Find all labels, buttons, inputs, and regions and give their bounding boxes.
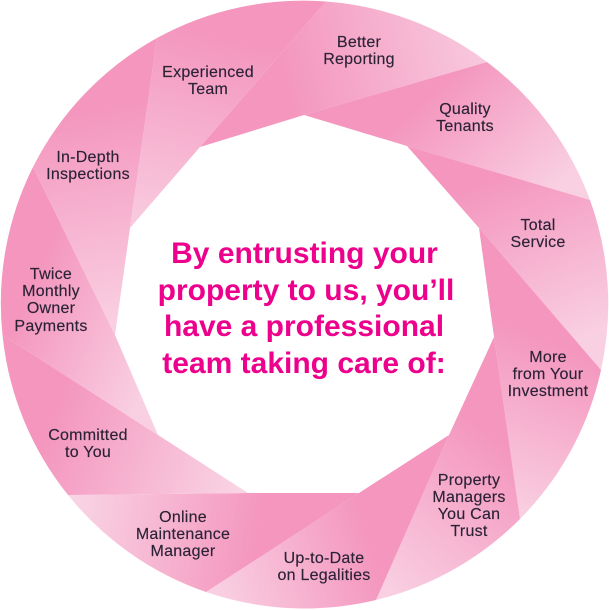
segment: Online Maintenance Manager bbox=[68, 493, 359, 592]
segment: Twice Monthly Owner Payments: Monthly bbox=[22, 283, 80, 300]
segment: Up-to-Date on Legalities: on Legalities bbox=[277, 567, 371, 584]
segment: Property Managers You Can Trust: Managers bbox=[432, 489, 506, 506]
segment: More from Your Investment: More bbox=[529, 349, 567, 366]
segment: Total Service bbox=[407, 146, 608, 370]
central heading: By entrusting your bbox=[171, 237, 438, 270]
central heading bbox=[158, 237, 454, 380]
segment: Property Managers You Can Trust: You Can bbox=[438, 506, 500, 523]
segment: Property Managers You Can Trust: Trust bbox=[450, 523, 488, 540]
segment: Twice Monthly Owner Payments: Twice bbox=[30, 266, 72, 283]
segment: Quality Tenants: Quality bbox=[439, 101, 491, 118]
segment: Committed to You: to You bbox=[65, 444, 111, 461]
central heading: team taking care of: bbox=[162, 347, 446, 380]
segment: Better Reporting: Reporting bbox=[323, 51, 395, 68]
segment: Up-to-Date on Legalities bbox=[206, 435, 449, 608]
segment: Twice Monthly Owner Payments: Owner bbox=[27, 300, 76, 317]
segment: Experienced Team: Experienced bbox=[162, 64, 254, 81]
segment: Up-to-Date on Legalities: Up-to-Date bbox=[284, 550, 364, 567]
segment: Property Managers You Can Trust bbox=[376, 337, 520, 600]
segment: Experienced Team: Team bbox=[188, 81, 228, 98]
segment: Committed to You bbox=[2, 335, 248, 495]
segment: Better Reporting bbox=[200, 2, 487, 147]
segment: Twice Monthly Owner Payments bbox=[1, 167, 158, 435]
central heading: property to us, you’ll bbox=[158, 274, 454, 307]
segment: Property Managers You Can Trust: Property bbox=[438, 472, 500, 489]
segment: Online Maintenance Manager: Manager bbox=[151, 543, 216, 560]
segment: In-Depth Inspections: In-Depth bbox=[56, 149, 120, 166]
segment: Committed to You: Committed bbox=[48, 427, 128, 444]
segment: More from Your Investment: from Your bbox=[513, 366, 584, 383]
segment: Quality Tenants: Tenants bbox=[436, 118, 494, 135]
segment: Better Reporting: Better bbox=[337, 34, 382, 51]
segment: More from Your Investment: Investment bbox=[508, 383, 589, 400]
segment: Online Maintenance Manager: Online bbox=[159, 509, 207, 526]
segment: Quality Tenants bbox=[304, 62, 590, 200]
central heading: have a professional bbox=[164, 310, 444, 343]
segment: Online Maintenance Manager: Maintenance bbox=[136, 526, 230, 543]
segment: Total Service: Total bbox=[520, 217, 556, 234]
segment: Total Service: Service bbox=[510, 234, 566, 251]
segment: In-Depth Inspections bbox=[33, 38, 157, 335]
segment: In-Depth Inspections: Inspections bbox=[46, 166, 130, 183]
segment: Twice Monthly Owner Payments: Payments bbox=[14, 318, 88, 335]
segment: Experienced Team bbox=[130, 1, 326, 228]
segment: More from Your Investment bbox=[479, 228, 601, 519]
